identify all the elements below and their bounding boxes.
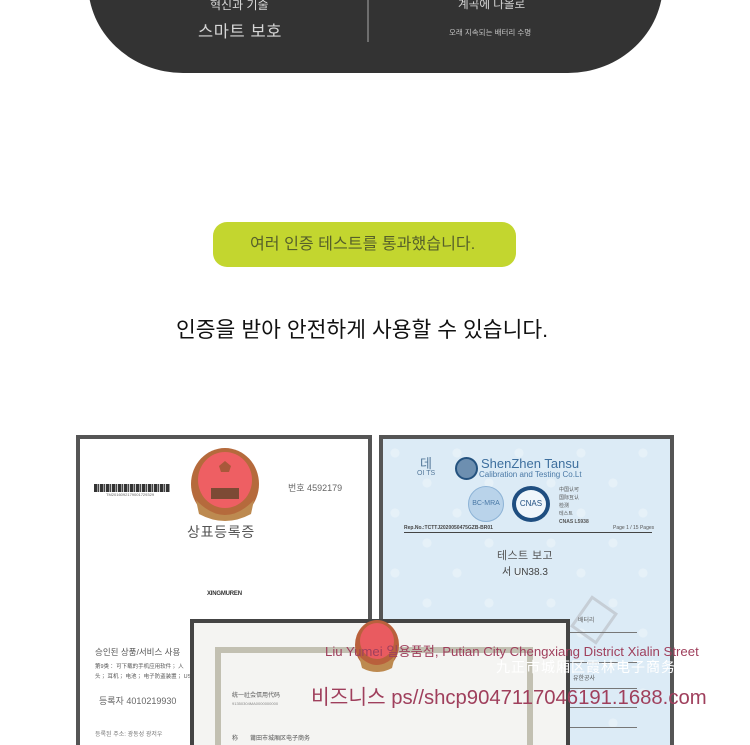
panel: business licence certificate: [190, 619, 570, 745]
icon: CNAS seal: CNAS: [520, 499, 542, 508]
small print lines: [95, 662, 195, 680]
icon: BC-MRA seal: [468, 486, 504, 522]
icon: licence emblem: [355, 620, 399, 672]
text: approved goods and services: 승인된 상품/서비스 사용: [95, 647, 180, 657]
company name: ShenZhen Tansu: [481, 456, 579, 471]
text: test report: 테스트 보고: [497, 550, 553, 562]
CNAS mark text: 国际互认: [559, 495, 579, 501]
text: company label: 유한공사: [573, 676, 595, 682]
logo text: test org: 데: [420, 456, 432, 471]
divider line between columns: [367, 0, 369, 42]
text: UN38.3: 서 UN38.3: [502, 567, 548, 578]
heading: certified and safe to use: 인증을 받아 안전하게 사용할 수 있습니다.: [176, 318, 548, 342]
heading: smart protection: 스마트 보호: [198, 23, 282, 41]
small print lines: 头； 耳机； 电池； 电子防盗装置； USB: [95, 674, 195, 680]
licence name row: 称 莆田市城厢区电子商务: [232, 736, 310, 742]
CNAS mark text: CNAS L5938: [559, 519, 589, 525]
form rule 2: [567, 662, 637, 663]
CNAS mark text: 中国认可: [559, 487, 579, 493]
text: longer lasting battery life: 오래 지속되는 배터리 수명: [449, 28, 531, 37]
text: registered address: 등록된 주소: 광동성 광저우: [95, 732, 162, 738]
panel: trademark certificate: [76, 435, 372, 745]
stamp watermark: [570, 595, 618, 645]
icon: BC-MRA seal: BC-MRA: [472, 500, 500, 507]
callout text: 여러 인증 테스트를 통과했습니다.: [250, 235, 475, 253]
barcode: [94, 484, 170, 492]
CNAS mark text: [559, 486, 589, 525]
form rule 5: [567, 727, 637, 728]
callout: passed multiple certification tests: [213, 222, 516, 267]
licence code text: 91350304MA0000000000: [232, 701, 278, 706]
form rule 1: [567, 632, 637, 633]
text: number: 번호 4592179: [288, 483, 342, 493]
panel: test report certificate: [379, 435, 674, 745]
overlay text: business URL: 비즈니스 ps//shcp9047117046191.1688.com: [311, 687, 707, 709]
logo text: TS: OI TS: [417, 470, 435, 477]
company subtitle: Calibration and Testing Co.Lt: [479, 470, 582, 479]
icon: CNAS seal: [512, 486, 550, 522]
icon: national emblem: [191, 448, 259, 521]
text: trademark registration: 상표등록증: [187, 524, 255, 540]
form rule 4: [567, 707, 637, 708]
form rule 3: [567, 688, 637, 689]
report number: Rep.No.:TCTTJ2020050475GZB-BR01: [404, 525, 493, 531]
panel: dark rounded feature card: [88, 0, 663, 73]
CNAS mark text: 检测: [559, 503, 569, 509]
text: registrant: 등록자 4010219930: [99, 696, 176, 706]
trademark logo: XINGMUREN: [207, 591, 242, 597]
decorative licence frame: [215, 647, 533, 745]
licence number text: 统一社会信用代码: [232, 693, 280, 699]
overlay text: white watermark: 九正市城厢区霞林电子商务: [496, 659, 676, 675]
barcode number: TM2016092179001729329: [106, 492, 154, 497]
page number: Page 1 / 15 Pages: [613, 525, 654, 531]
overlay text: shop name and address: Liu Yumei 일용품점, Putian City Chengxiang District Xialin Street: [325, 644, 699, 659]
CNAS mark text: 테스트: [559, 511, 573, 517]
text: battery label: 배터리: [578, 618, 595, 624]
small print lines: 第9类： 可下载的手机应用软件； 人: [95, 664, 184, 670]
report rule: [404, 532, 652, 533]
icon: company globe: [455, 457, 478, 480]
